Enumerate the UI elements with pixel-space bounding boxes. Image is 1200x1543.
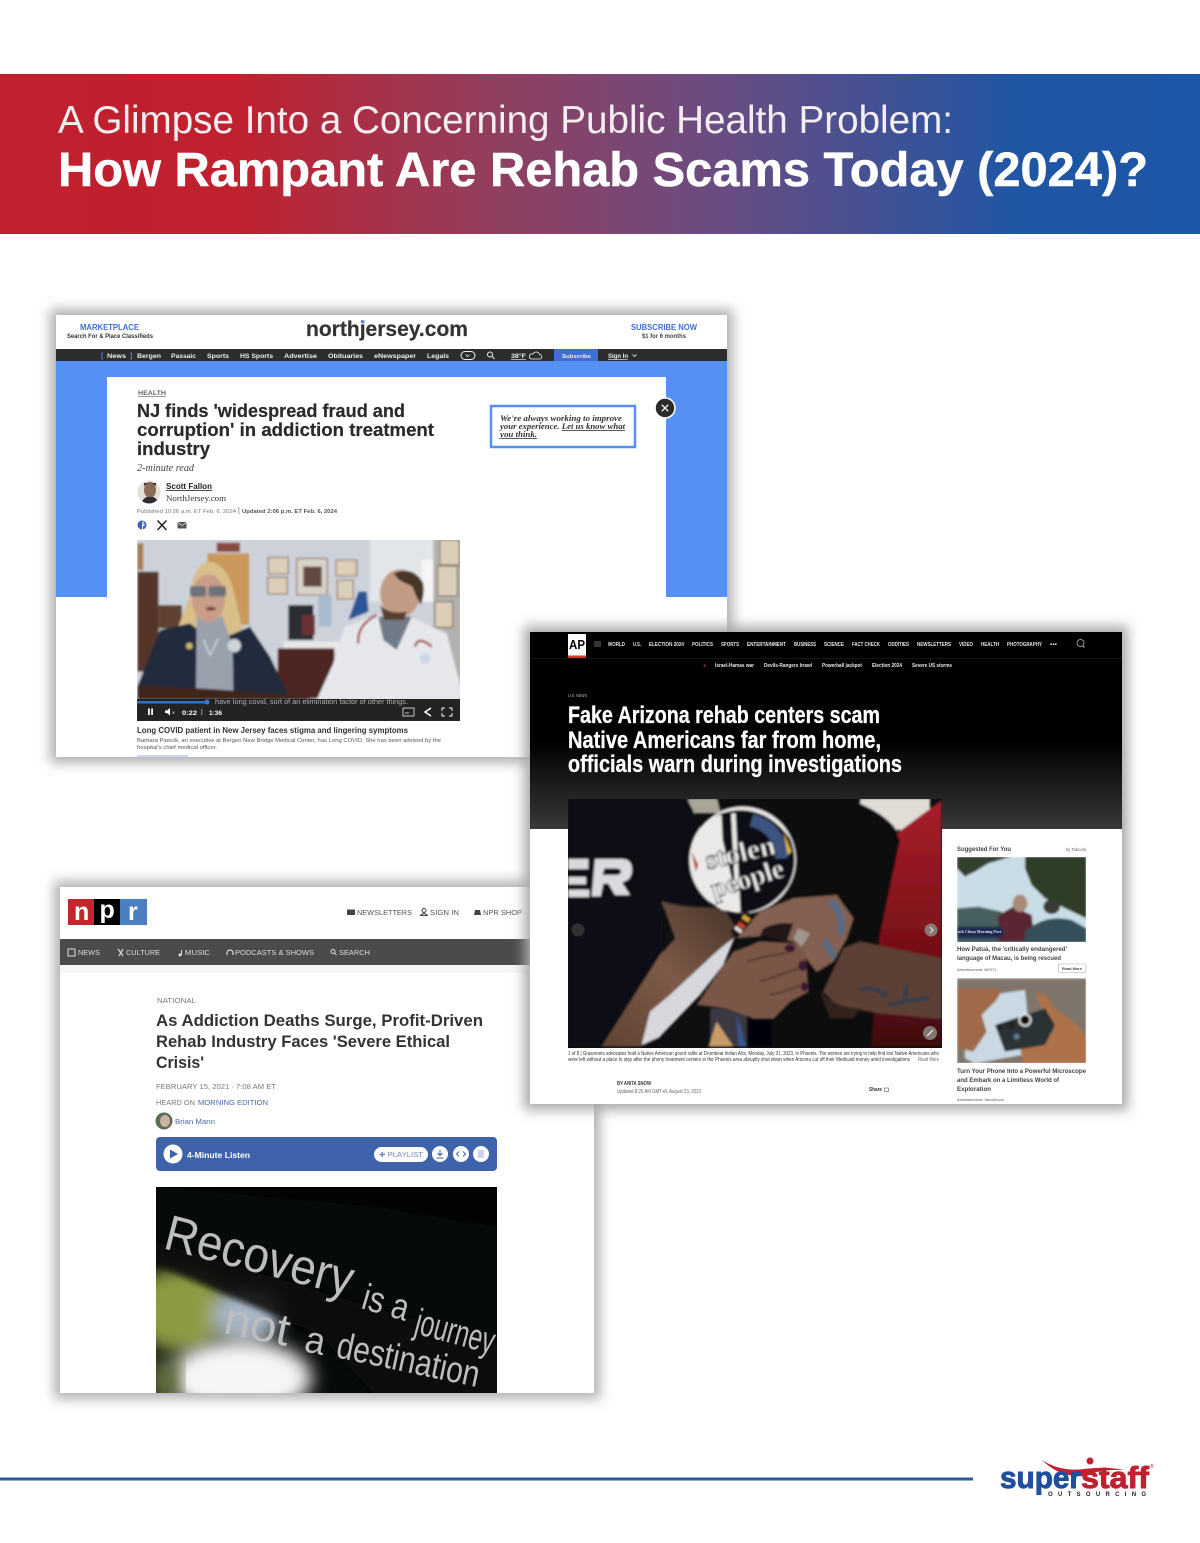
AP navigation: NEWSLETTERS — [917, 642, 952, 648]
navigation bar: News — [107, 353, 126, 360]
AP headline: Native Americans far from home, — [568, 727, 881, 754]
masthead: SUBSCRIBE NOW — [631, 323, 697, 332]
AP navigation: POLITICS — [692, 642, 714, 648]
navigation bar: Subscribe — [562, 354, 591, 360]
AP navigation: ELECTION 2024 — [649, 642, 684, 648]
AP photo caption: 1 of 8 | Grassroots advocates hold a Native American gourd rattle at Drumbeat Indian Arts, Monday, July 31, 2023, in Phoenix. The women are trying to help find lost Native Americans who — [568, 1051, 939, 1057]
AP navigation: FACT CHECK — [852, 642, 880, 648]
navigation bar: ] — [130, 353, 132, 360]
suggested sidebar: Advertisement: NanoZoom — [957, 1097, 1005, 1102]
NPR article headline: FEBRUARY 15, 2021 · 7:08 AM ET — [156, 1082, 276, 1091]
AP navigation: HEALTH — [981, 642, 999, 648]
NPR article headline: NATIONAL — [157, 996, 196, 1005]
Superstaff Outsourcing logo: super — [1000, 1460, 1081, 1495]
AP navigation: Severe US storms — [912, 663, 952, 669]
suggested sidebar: How Patuá, the 'critically endangered' — [957, 946, 1067, 953]
feedback box: We're always working to improve — [500, 414, 622, 423]
shirt lettering — [568, 859, 589, 897]
footer rule — [0, 1478, 973, 1480]
AP navigation: PHOTOGRAPHY — [1007, 642, 1043, 648]
navigation bar: Sports — [207, 353, 229, 360]
video controls: 0:22 — [182, 710, 197, 717]
photo: recovery is a journey window sign — [156, 1187, 497, 1393]
NPR article headline: As Addiction Deaths Surge, Profit-Driven — [156, 1011, 483, 1030]
navigation bar: Legals — [427, 353, 449, 360]
masthead: MARKETPLACE — [80, 323, 140, 332]
AP headline: officials warn during investigations — [568, 751, 902, 778]
suggested sidebar: Advertisement: MGTO — [957, 967, 996, 972]
table — [137, 685, 317, 700]
audio player: ✚ PLAYLIST — [379, 1151, 424, 1159]
navigation bar: Sign In — [608, 353, 628, 360]
article head: HEALTH — [138, 390, 166, 397]
AP headline: Fake Arizona rehab centers scam — [568, 702, 880, 729]
AP byline — [617, 1081, 893, 1095]
navigation bar: eNewspaper — [374, 353, 417, 360]
article head — [137, 390, 434, 474]
suggested sidebar: language of Macau, is being rescued — [957, 955, 1061, 962]
suggested sidebar: by Taboola — [1066, 847, 1086, 852]
AP navigation: U.S. — [633, 642, 641, 648]
author byline — [137, 480, 338, 515]
author byline: NorthJersey.com — [166, 493, 226, 503]
navigation bar: Bergen — [137, 353, 161, 360]
photo: recovery is a journey window sign: not — [220, 1293, 295, 1356]
navigation bar: Obituaries — [328, 353, 363, 360]
AP byline: BY ANITA SNOW — [617, 1081, 652, 1087]
suggested sidebar: Read More — [1062, 966, 1083, 971]
AP logo: AP — [569, 637, 585, 652]
AP navigation: WORLD — [608, 642, 625, 648]
NPR article headline: Crisis' — [156, 1053, 204, 1072]
NPR logo: r — [128, 898, 138, 926]
gourd — [689, 807, 796, 913]
masthead: $1 for 6 months — [642, 334, 687, 340]
photo: recovery is a journey window sign: is a — [358, 1276, 415, 1329]
AP photo caption: were left without a place to stay after the phony treatment centers in the Phoenix area abruptly shut down when Arizona cut off their Medicaid money amid investigations — [568, 1057, 910, 1063]
feedback box — [491, 406, 635, 447]
title line 2: How Rampant Are Rehab Scams Today (2024)? — [58, 144, 1148, 197]
feedback box: you think. — [499, 430, 537, 439]
AP byline: Updated 8:25 AM GMT+8, August 23, 2023 — [617, 1089, 701, 1095]
NPR logo — [68, 896, 147, 926]
AP byline: Share — [869, 1087, 882, 1093]
panel: AP News screenshot — [524, 626, 1128, 1110]
video caption — [137, 726, 441, 757]
beaded handle — [734, 913, 749, 934]
navigation bar: 38°F — [511, 352, 526, 360]
NPR article headline — [156, 996, 483, 1107]
title line 1: A Glimpse Into a Concerning Public Health Problem: — [58, 99, 953, 142]
video controls: cc — [405, 710, 409, 715]
author byline: Published 10:26 a.m. ET Feb. 6, 2024 — [137, 509, 236, 515]
feather — [642, 937, 735, 1045]
article head: industry — [137, 438, 211, 459]
lower hand — [697, 942, 808, 1018]
video controls: × — [172, 710, 175, 716]
NPR navigation bar: PODCASTS & SHOWS — [235, 948, 314, 957]
navigation bar: HS Sports — [240, 353, 273, 360]
suggested sidebar — [957, 846, 1086, 1102]
sidebar photo: man on a motorbike — [957, 857, 1086, 943]
AP headline — [568, 693, 902, 778]
backdrop — [688, 798, 722, 813]
straps and skirt detail — [710, 1008, 747, 1047]
AP photo caption — [568, 1051, 939, 1063]
NPR utility links: SIGN IN — [430, 908, 459, 917]
share icons — [138, 520, 186, 530]
photo: recovery is a journey window sign: Recovery — [159, 1204, 360, 1307]
photo: recovery is a journey window sign: destination — [333, 1325, 484, 1395]
masthead — [67, 318, 697, 341]
video controls: have long covid, sort of an elimination factor of other things. — [215, 697, 408, 706]
AP photo caption: Read More — [918, 1057, 939, 1063]
video caption: Barbara Piascik, an executive at Bergen New Bridge Medical Center, has Long COVID. She has been advised by the — [137, 738, 441, 744]
right forearm — [823, 942, 942, 1019]
photo: hands holding stolen people gourd rattle: stolen — [702, 830, 779, 876]
AP navigation: BUSINESS — [794, 642, 817, 648]
NPR utility links: NEWSLETTERS — [357, 908, 412, 917]
AP navigation: VIDEO — [959, 642, 973, 648]
photo: recovery is a journey window sign: journey — [410, 1301, 500, 1362]
photo: hands holding stolen people gourd rattle: people — [707, 853, 788, 905]
navigation bar: Advertise — [284, 353, 317, 360]
NPR navigation bar: NEWS — [78, 948, 100, 957]
article head: corruption' in addiction treatment — [137, 419, 434, 440]
AP navigation: SPORTS — [721, 642, 740, 648]
man in white coat — [317, 615, 461, 700]
NPR navigation bar: CULTURE — [126, 948, 160, 957]
NPR utility links: NPR SHOP — [483, 908, 522, 917]
NPR logo: n — [74, 898, 89, 926]
video still: two people in a medical office — [137, 538, 462, 722]
woman in navy jacket — [178, 562, 243, 637]
author byline: Updated 2:06 p.m. ET Feb. 6, 2024 — [242, 509, 338, 515]
NPR article headline: Rehab Industry Faces 'Severe Ethical — [156, 1032, 450, 1051]
Superstaff Outsourcing logo: staff — [1081, 1460, 1150, 1495]
NPR navigation bar: MUSIC — [185, 948, 211, 957]
video controls: 1:36 — [209, 710, 222, 717]
title banner — [0, 74, 1200, 234]
navigation bar: Passaic — [171, 353, 196, 360]
audio player — [156, 1137, 497, 1171]
suggested sidebar: and Embark on a Limitless World of — [957, 1077, 1060, 1084]
article head: 2-minute read — [137, 463, 195, 474]
AP headline: U.S. NEWS — [568, 693, 587, 698]
Superstaff Outsourcing logo: OUTSOURCING — [1048, 1492, 1146, 1498]
upper hand — [737, 895, 853, 972]
AP logo — [568, 634, 586, 658]
AP navigation: ODDITIES — [888, 642, 910, 648]
Superstaff Outsourcing logo: ® — [1150, 1463, 1154, 1470]
AP navigation: ENTERTAINMENT — [747, 642, 786, 648]
photo: hands holding stolen people gourd rattle — [568, 798, 942, 1048]
AP navigation: Israel-Hamas war — [715, 663, 754, 669]
suggested sidebar: Suggested For You — [957, 846, 1011, 853]
AP navigation: Devils-Rangers brawl — [764, 663, 813, 669]
masthead: Search For & Place Classifieds — [67, 334, 154, 340]
AP navigation — [530, 640, 1122, 669]
NPR article headline: MORNING EDITION — [198, 1098, 268, 1107]
video caption: Long COVID patient in New Jersey faces stigma and lingering symptoms — [137, 726, 409, 735]
sidebar photo: phone with clip-on microscope — [957, 978, 1086, 1064]
NPR logo: p — [100, 896, 115, 924]
masthead: northjersey.com — [306, 318, 468, 341]
video controls — [137, 697, 460, 721]
navigation bar — [56, 349, 727, 361]
article head: NJ finds 'widespread fraud and — [137, 400, 405, 421]
AP navigation: Election 2024 — [872, 663, 902, 669]
AP navigation: Powerball jackpot — [822, 663, 862, 669]
navigation bar: [ — [101, 353, 104, 360]
photo: recovery is a journey window sign: a — [301, 1319, 330, 1364]
AP navigation: SCIENCE — [824, 642, 845, 648]
NPR navigation bar — [60, 939, 594, 973]
panel: NPR screenshot — [54, 881, 600, 1416]
NPR author: Brian Mann — [175, 1117, 215, 1126]
left forearm — [602, 902, 737, 1047]
close button — [655, 398, 675, 418]
NPR navigation bar: SEARCH — [339, 948, 370, 957]
NPR utility links — [347, 908, 522, 917]
sidebar photo: man on a motorbike: uth China Morning Post — [958, 929, 1002, 934]
blue page background — [56, 361, 727, 597]
video caption: hospital's chief medical officer. — [137, 745, 218, 751]
author byline: Scott Fallon — [166, 482, 212, 491]
panel: northjersey.com screenshot — [50, 309, 733, 763]
suggested sidebar: Exploration — [957, 1086, 991, 1093]
feedback box: your experience. Let us know what — [499, 422, 626, 431]
suggested sidebar: Turn Your Phone Into a Powerful Microscope — [957, 1068, 1086, 1075]
AP navigation: ••• — [1050, 642, 1057, 648]
NPR author — [156, 1112, 215, 1130]
Superstaff Outsourcing logo — [1000, 1458, 1154, 1498]
NPR article headline: HEARD ON — [156, 1098, 195, 1107]
audio player: 4-Minute Listen — [187, 1150, 250, 1160]
